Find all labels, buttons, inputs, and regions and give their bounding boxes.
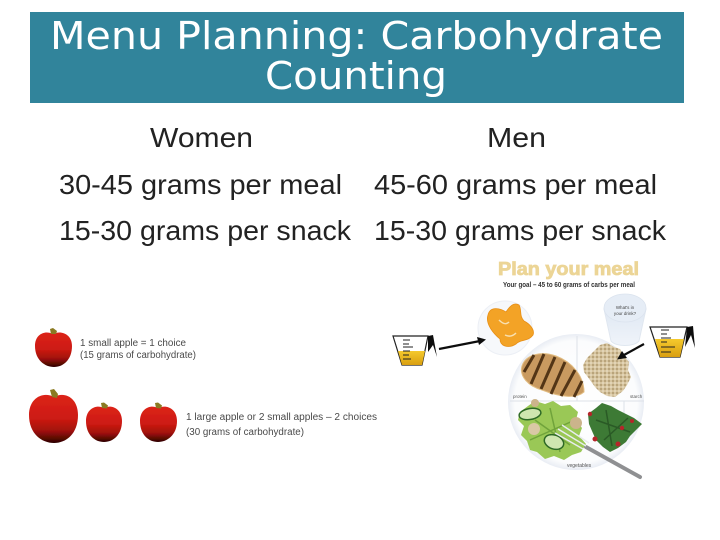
fork bbox=[555, 425, 640, 477]
men column bbox=[374, 122, 667, 246]
measuring cup right bbox=[650, 326, 695, 357]
large dinner plate: protein bbox=[513, 394, 527, 399]
title banner: Menu Planning: Carbohydrate bbox=[50, 14, 663, 58]
title banner: Counting bbox=[265, 54, 447, 98]
apple caption: two choices: (30 grams of carbohydrate) bbox=[186, 427, 304, 438]
grilled chicken bbox=[521, 354, 584, 397]
plan your meal illustration bbox=[393, 259, 695, 477]
subheading: goal: Your goal – 45 to 60 grams of carbs per meal bbox=[503, 280, 635, 289]
men column: Men bbox=[487, 122, 546, 153]
apple caption: two choices: 1 large apple or 2 small apples – 2 choices bbox=[186, 412, 377, 423]
title banner bbox=[30, 12, 684, 103]
icon: small apple three bbox=[140, 402, 177, 442]
arrow to side plate bbox=[439, 337, 486, 349]
arrow to rice bbox=[617, 344, 644, 360]
women column bbox=[59, 122, 352, 246]
green salad bbox=[518, 399, 586, 460]
apple caption: one choice: 1 small apple = 1 choice bbox=[80, 338, 186, 349]
apple caption: one choice: (15 grams of carbohydrate) bbox=[80, 350, 196, 361]
small side plate with squash bbox=[478, 301, 533, 355]
glass of milk: your drink? bbox=[614, 311, 637, 316]
measuring cup left bbox=[393, 335, 437, 365]
large dinner plate: starch bbox=[630, 394, 643, 399]
women column: 30-45 grams per meal bbox=[59, 169, 342, 200]
apple caption: two choices bbox=[186, 412, 377, 438]
glass of milk: What's in bbox=[616, 305, 635, 310]
icon: small apple two bbox=[86, 402, 122, 442]
men column: 15-30 grams per snack bbox=[374, 215, 667, 246]
heading: plan your meal: Plan your meal bbox=[498, 259, 639, 279]
rice bbox=[583, 343, 631, 397]
men column: 45-60 grams per meal bbox=[374, 169, 657, 200]
icon: one small apple bbox=[35, 328, 72, 367]
icon: large apple bbox=[29, 389, 78, 443]
women column: 15-30 grams per snack bbox=[59, 215, 352, 246]
large dinner plate: vegetables bbox=[567, 463, 592, 469]
large dinner plate bbox=[508, 334, 644, 470]
women column: Women bbox=[150, 122, 253, 153]
apple caption: one choice bbox=[80, 338, 196, 361]
spinach and tomato bbox=[588, 403, 642, 452]
glass of milk bbox=[604, 294, 646, 346]
